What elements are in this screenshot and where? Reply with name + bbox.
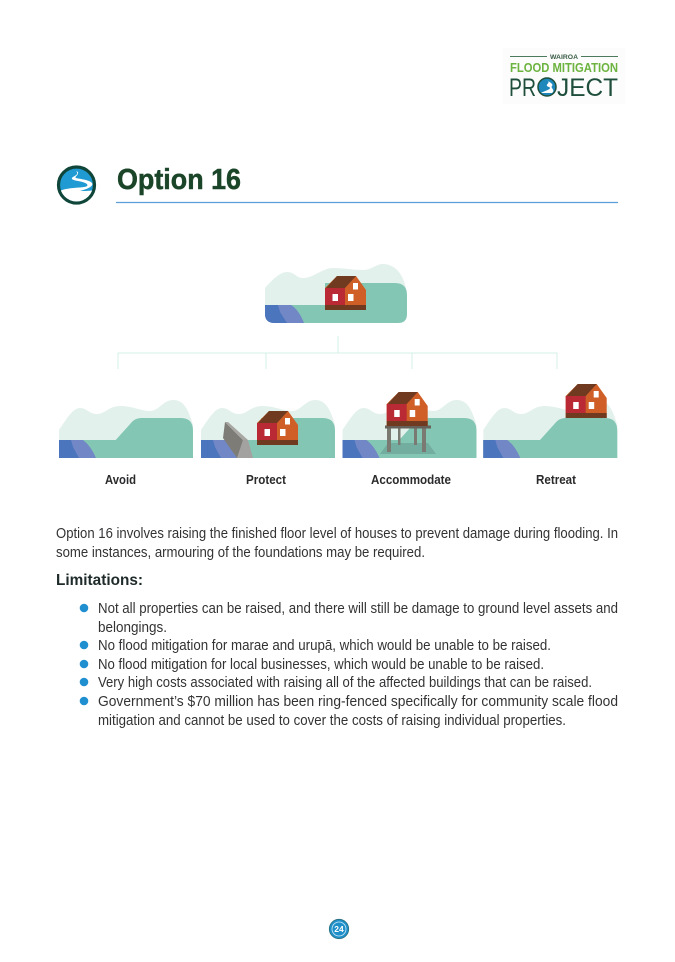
bullet list: limitations: mitigation and cannot be used to cover the costs of raising individual properties. bbox=[98, 713, 566, 729]
icon: house bbox=[257, 411, 298, 445]
panel: avoid bbox=[59, 400, 193, 487]
logo: Wairoa Flood Mitigation Project: PR bbox=[509, 74, 536, 102]
panel: accommodate bbox=[342, 392, 476, 487]
infographic page bbox=[56, 54, 618, 940]
bullet list: limitations: Government’s $70 million has been ring-fenced specifically for community scale flood bbox=[98, 694, 618, 710]
logo: Wairoa Flood Mitigation Project bbox=[503, 48, 625, 104]
panel: protect bbox=[201, 400, 335, 487]
bullet list: limitations bbox=[80, 601, 618, 729]
heading: limitations: Limitations: bbox=[56, 572, 143, 589]
logo: Wairoa Flood Mitigation Project: FLOOD MITIGATION bbox=[510, 61, 618, 75]
bullet list: limitations: Very high costs associated with raising all of the affected buildings that can be raised. bbox=[98, 675, 592, 691]
icon: house on high ground bbox=[566, 384, 607, 418]
intro paragraph: some instances, armouring of the foundations may be required. bbox=[56, 545, 425, 561]
label: avoid: Avoid bbox=[105, 472, 136, 487]
bullet list: limitations: No flood mitigation for marae and urupā, which would be unable to be raised. bbox=[98, 638, 551, 654]
label: accommodate: Accommodate bbox=[371, 472, 451, 487]
label: retreat: Retreat bbox=[536, 472, 577, 487]
logo: Wairoa Flood Mitigation Project: JECT bbox=[557, 74, 618, 102]
bullet list: limitations: No flood mitigation for local businesses, which would be unable to be raised. bbox=[98, 657, 544, 673]
diagram: current state scene bbox=[265, 264, 407, 323]
page number badge bbox=[329, 919, 349, 939]
label: protect: Protect bbox=[246, 472, 287, 487]
intro paragraph bbox=[56, 526, 618, 561]
bullet list: limitations: belongings. bbox=[98, 620, 167, 636]
logo: Wairoa Flood Mitigation Project: WAIROA bbox=[550, 55, 579, 61]
panel: retreat bbox=[483, 384, 617, 487]
title: Option 16 bbox=[117, 164, 241, 196]
tree connector bbox=[118, 336, 557, 369]
icon: house on stilts bbox=[380, 392, 436, 454]
icon: river badge bbox=[58, 167, 96, 206]
page number badge: 24 bbox=[334, 924, 344, 934]
intro paragraph: Option 16 involves raising the finished floor level of houses to prevent damage during flooding. In bbox=[56, 526, 618, 542]
icon: sea wall bbox=[223, 422, 253, 458]
bullet list: limitations: Not all properties can be raised, and there will still be damage to ground level assets and bbox=[98, 601, 618, 617]
